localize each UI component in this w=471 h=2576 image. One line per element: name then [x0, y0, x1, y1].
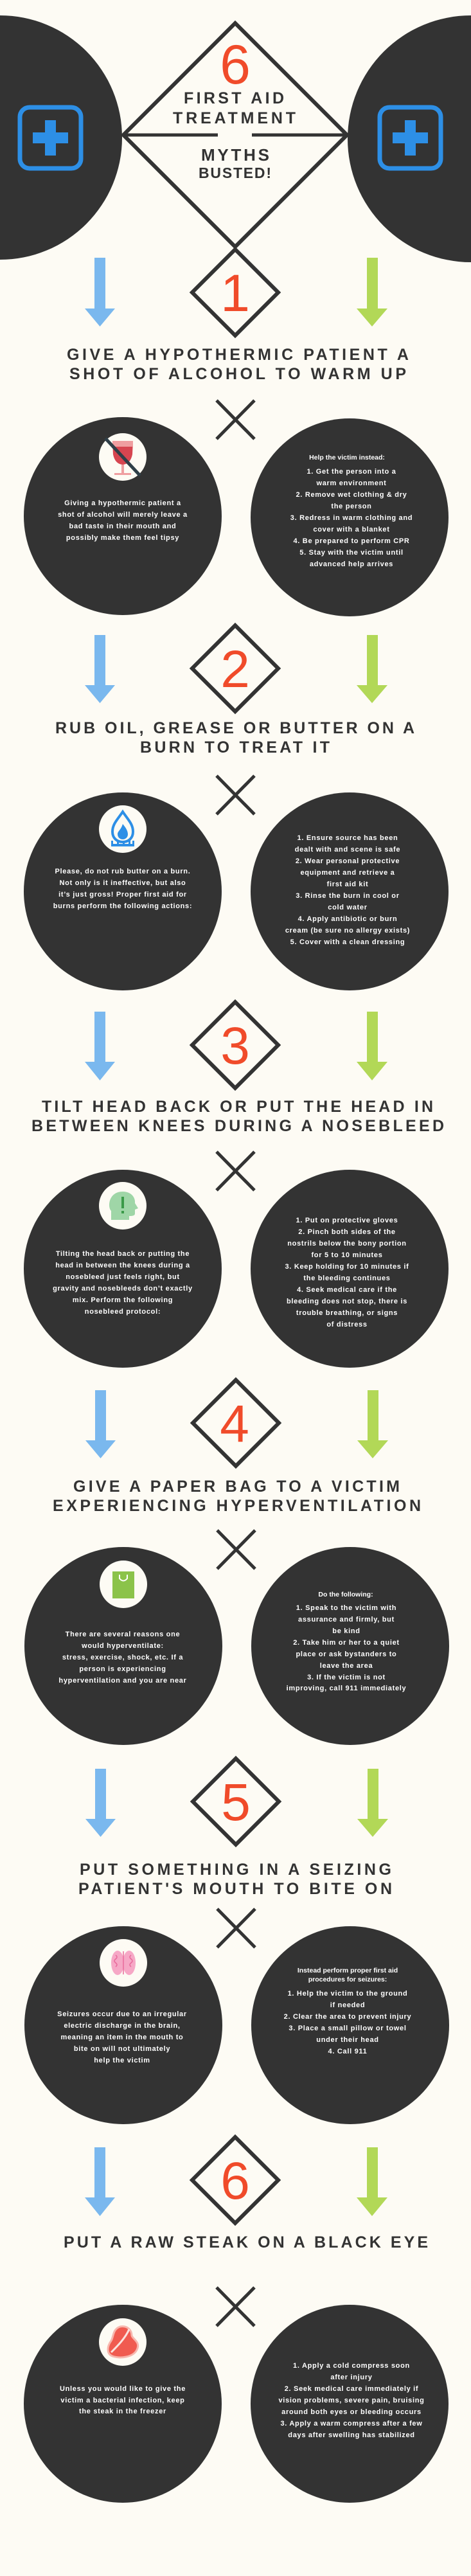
- header: title diamond: TREATMENT: [173, 109, 296, 127]
- panel: correct treatment 2: equipment and retrieve a: [300, 869, 395, 877]
- panel: myth explanation 1: shot of alcohol will merely leave a: [58, 511, 188, 519]
- icon: X mark 6: [217, 2287, 254, 2326]
- panel: correct treatment 2: [251, 792, 449, 990]
- number diamond 1: 1: [220, 264, 250, 323]
- panel: correct treatment 5: [251, 1926, 449, 2124]
- panel: correct treatment 6: 2. Seek medical care immediately if: [285, 2385, 418, 2393]
- panel: correct treatment 5: Instead perform proper first aid: [298, 1967, 398, 1974]
- panel: correct treatment 1: Help the victim instead:: [309, 454, 385, 461]
- icon: X mark 2: [217, 776, 254, 814]
- panel: myth explanation 2: Please, do not rub butter on a burn.: [55, 868, 190, 875]
- panel: myth explanation 3: mix. Perform the following: [73, 1296, 173, 1304]
- panel: correct treatment 6: around both eyes or bleeding occurs: [281, 2408, 422, 2416]
- panel: myth explanation 3: [24, 1170, 222, 1368]
- myth title 5: [78, 1861, 392, 1898]
- number diamond 5: 5: [221, 1773, 251, 1832]
- panel: correct treatment 6: vision problems, severe pain, bruising: [278, 2397, 425, 2404]
- panel: correct treatment 1: advanced help arrives: [310, 560, 393, 568]
- myth title 2: RUB OIL, GREASE OR BUTTER ON A: [55, 719, 414, 737]
- icon: X mark 1: [217, 400, 254, 439]
- number diamond 4: [193, 1380, 279, 1466]
- panel: myth explanation 5: [24, 1926, 222, 2124]
- number diamond 5: [193, 1758, 279, 1845]
- arrow: blue left 3: [85, 1012, 115, 1080]
- panel: myth explanation 2: Not only is it ineffective, but also: [60, 879, 186, 887]
- panel: correct treatment 4: assurance and firmly, but: [298, 1616, 395, 1623]
- panel: myth explanation 2: burns perform the following actions:: [53, 902, 192, 910]
- panel: correct treatment 2: dealt with and scene is safe: [295, 846, 400, 854]
- panel: myth explanation 4: person is experiencing: [79, 1665, 166, 1673]
- panel: correct treatment 3: bleeding does not stop, there is: [287, 1298, 407, 1305]
- number diamond 6: [192, 2137, 278, 2223]
- panel: correct treatment 4: 3. If the victim is not: [307, 1674, 386, 1681]
- icon: head with exclamation: [99, 1182, 147, 1230]
- icon: flame: [99, 805, 147, 853]
- panel: correct treatment 1: warm environment: [315, 479, 387, 487]
- panel: correct treatment 5: under their head: [316, 2036, 379, 2044]
- number diamond 6: 6: [220, 2152, 250, 2210]
- myth title 1: SHOT OF ALCOHOL TO WARM UP: [69, 365, 406, 383]
- header: title diamond: [123, 23, 347, 247]
- header: title diamond: FIRST AID: [184, 89, 284, 107]
- arrow: blue left 6: [85, 2147, 115, 2216]
- panel: correct treatment 5: 4. Call 911: [328, 2048, 367, 2055]
- panel: correct treatment 4: 2. Take him or her to a quiet: [293, 1639, 400, 1647]
- panel: myth explanation 3: head in between the knees during a: [55, 1262, 190, 1269]
- panel: myth explanation 1: bad taste in their mouth and: [69, 523, 176, 530]
- arrow: green right 6: [357, 2147, 387, 2216]
- panel: myth explanation 3: Tilting the head back or putting the: [56, 1250, 190, 1258]
- panel: myth explanation 1: possibly make them feel tipsy: [66, 534, 179, 542]
- panel: correct treatment 5: if needed: [330, 2001, 365, 2009]
- panel: correct treatment 6: after injury: [330, 2374, 373, 2381]
- panel: correct treatment 3: [251, 1170, 449, 1368]
- panel: correct treatment 2: 1. Ensure source has been: [298, 834, 398, 842]
- myth title 6: PUT A RAW STEAK ON A BLACK EYE: [64, 2233, 428, 2251]
- panel: correct treatment 3: of distress: [326, 1321, 368, 1328]
- panel: myth explanation 1: Giving a hypothermic patient a: [64, 499, 181, 507]
- header: title diamond: MYTHS: [201, 145, 269, 165]
- panel: myth explanation 6: victim a bacterial infection, keep: [60, 2397, 185, 2404]
- panel: correct treatment 1: the person: [331, 503, 372, 510]
- myth title 2: BURN TO TREAT IT: [140, 738, 330, 756]
- panel: myth explanation 4: hyperventilation and you are near: [58, 1677, 187, 1685]
- panel: myth explanation 4: would hyperventilate:: [81, 1642, 164, 1650]
- panel: correct treatment 3: 2. Pinch both sides of the: [298, 1228, 396, 1236]
- panel: correct treatment 5: 1. Help the victim to the ground: [288, 1990, 407, 1998]
- icon: brain: [100, 1939, 147, 1987]
- panel: correct treatment 4: improving, call 911 immediately: [287, 1685, 407, 1692]
- icon: no alcohol: [99, 433, 147, 481]
- panel: correct treatment 6: 1. Apply a cold compress soon: [293, 2362, 410, 2370]
- panel: correct treatment 2: cream (be sure no allergy exists): [285, 927, 410, 935]
- myth title 4: [53, 1478, 421, 1515]
- icon: X mark 3: [217, 1152, 254, 1190]
- panel: correct treatment 1: cover with a blanket: [313, 526, 390, 533]
- arrow: green right 3: [357, 1012, 387, 1080]
- arrow: green right 1: [357, 258, 387, 326]
- myth title 1: [67, 346, 409, 383]
- panel: myth explanation 4: [24, 1547, 222, 1745]
- panel: correct treatment 1: 5. Stay with the victim until: [299, 549, 404, 557]
- panel: correct treatment 5: 2. Clear the area to prevent injury: [284, 2013, 412, 2021]
- number diamond 2: [192, 625, 278, 711]
- panel: myth explanation 6: [24, 2305, 222, 2503]
- panel: myth explanation 5: help the victim: [94, 2057, 150, 2064]
- myth title 5: PUT SOMETHING IN A SEIZING: [80, 1861, 391, 1879]
- panel: correct treatment 1: 3. Redress in warm clothing and: [290, 514, 413, 522]
- header: right half circle with plus icon: [348, 15, 471, 262]
- header: title diamond: BUSTED!: [199, 165, 271, 181]
- icon: raw steak: [99, 2318, 147, 2366]
- myth title 3: [31, 1098, 444, 1135]
- arrow: blue left 5: [85, 1769, 116, 1837]
- panel: correct treatment 3: nostrils below the bony portion: [287, 1240, 407, 1248]
- panel: correct treatment 6: 3. Apply a warm compress after a few: [280, 2420, 423, 2428]
- panel: correct treatment 4: 1. Speak to the victim with: [296, 1604, 396, 1612]
- myth title 2: [55, 719, 414, 756]
- number diamond 1: [192, 249, 278, 335]
- arrow: green right 2: [357, 635, 387, 703]
- header: title diamond: 6: [220, 34, 251, 96]
- panel: correct treatment 4: [251, 1547, 449, 1745]
- panel: correct treatment 2: cold water: [328, 904, 368, 911]
- panel: myth explanation 3: nosebleed protocol:: [85, 1308, 161, 1316]
- panel: correct treatment 2: first aid kit: [327, 881, 368, 888]
- panel: correct treatment 6: days after swelling has stabilized: [288, 2431, 415, 2439]
- myth title 5: PATIENT'S MOUTH TO BITE ON: [78, 1880, 392, 1898]
- panel: correct treatment 3: trouble breathing, or signs: [296, 1309, 398, 1317]
- number diamond 3: [192, 1002, 278, 1088]
- number diamond 4: 4: [220, 1395, 249, 1453]
- panel: correct treatment 6: [251, 2305, 449, 2503]
- arrow: blue left 1: [85, 258, 115, 326]
- panel: correct treatment 1: 4. Be prepared to perform CPR: [293, 537, 410, 545]
- panel: correct treatment 3: 4. Seek medical care if the: [297, 1286, 397, 1294]
- myth title 1: GIVE A HYPOTHERMIC PATIENT A: [67, 346, 409, 364]
- panel: myth explanation 4: There are several reasons one: [66, 1631, 180, 1638]
- icon: green paper bag: [100, 1561, 147, 1608]
- panel: correct treatment 4: be kind: [332, 1627, 360, 1635]
- arrow: green right 4: [357, 1390, 388, 1458]
- number diamond 2: 2: [220, 640, 250, 699]
- panel: myth explanation 6: the steak in the freezer: [79, 2408, 166, 2415]
- panel: correct treatment 5: 3. Place a small pillow or towel: [289, 2025, 407, 2032]
- icon: X mark 5: [217, 1909, 255, 1947]
- panel: myth explanation 1: [24, 417, 222, 615]
- myth title 4: EXPERIENCING HYPERVENTILATION: [53, 1497, 421, 1515]
- number diamond 3: 3: [220, 1017, 250, 1075]
- panel: myth explanation 2: it’s just gross! Proper first aid for: [58, 891, 187, 899]
- panel: correct treatment 1: 1. Get the person into a: [307, 468, 396, 476]
- panel: correct treatment 2: 5. Cover with a clean dressing: [290, 938, 405, 946]
- panel: correct treatment 3: for 5 to 10 minutes: [311, 1251, 383, 1259]
- panel: myth explanation 3: gravity and nosebleeds don’t exactly: [53, 1285, 193, 1292]
- panel: correct treatment 3: 3. Keep holding for 10 minutes if: [285, 1263, 409, 1271]
- myth title 3: TILT HEAD BACK OR PUT THE HEAD IN: [42, 1098, 433, 1116]
- panel: correct treatment 1: 2. Remove wet clothing & dry: [296, 491, 407, 499]
- myth title 3: BETWEEN KNEES DURING A NOSEBLEED: [31, 1117, 444, 1135]
- panel: correct treatment 4: Do the following:: [318, 1591, 373, 1598]
- panel: correct treatment 5: procedures for seizures:: [308, 1976, 387, 1983]
- panel: correct treatment 3: 1. Put on protective gloves: [296, 1217, 398, 1224]
- panel: myth explanation 5: meaning an item in the mouth to: [61, 2034, 183, 2041]
- panel: correct treatment 2: 3. Rinse the burn in cool or: [296, 892, 400, 900]
- panel: correct treatment 1: [251, 418, 449, 616]
- header: left half circle with plus icon: [0, 15, 122, 260]
- panel: correct treatment 4: place or ask bystanders to: [296, 1650, 396, 1658]
- panel: correct treatment 3: the bleeding continues: [303, 1275, 391, 1282]
- panel: myth explanation 4: stress, exercise, shock, etc. If a: [62, 1654, 183, 1661]
- panel: correct treatment 4: leave the area: [320, 1662, 373, 1670]
- panel: myth explanation 6: Unless you would like to give the: [60, 2385, 186, 2393]
- arrow: green right 5: [357, 1769, 388, 1837]
- myth title 4: GIVE A PAPER BAG TO A VICTIM: [73, 1478, 400, 1496]
- arrow: blue left 4: [85, 1390, 116, 1458]
- panel: myth explanation 2: [24, 792, 222, 990]
- panel: correct treatment 2: 4. Apply antibiotic or burn: [298, 915, 397, 923]
- arrow: blue left 2: [85, 635, 115, 703]
- panel: correct treatment 2: 2. Wear personal protective: [296, 857, 400, 865]
- panel: myth explanation 5: bite on will not ultimately: [74, 2045, 170, 2053]
- icon: X mark 4: [217, 1530, 255, 1569]
- panel: myth explanation 3: nosebleed just feels right, but: [66, 1273, 180, 1281]
- panel: myth explanation 5: Seizures occur due to an irregular: [57, 2010, 187, 2018]
- panel: myth explanation 5: electric discharge in the brain,: [64, 2022, 181, 2030]
